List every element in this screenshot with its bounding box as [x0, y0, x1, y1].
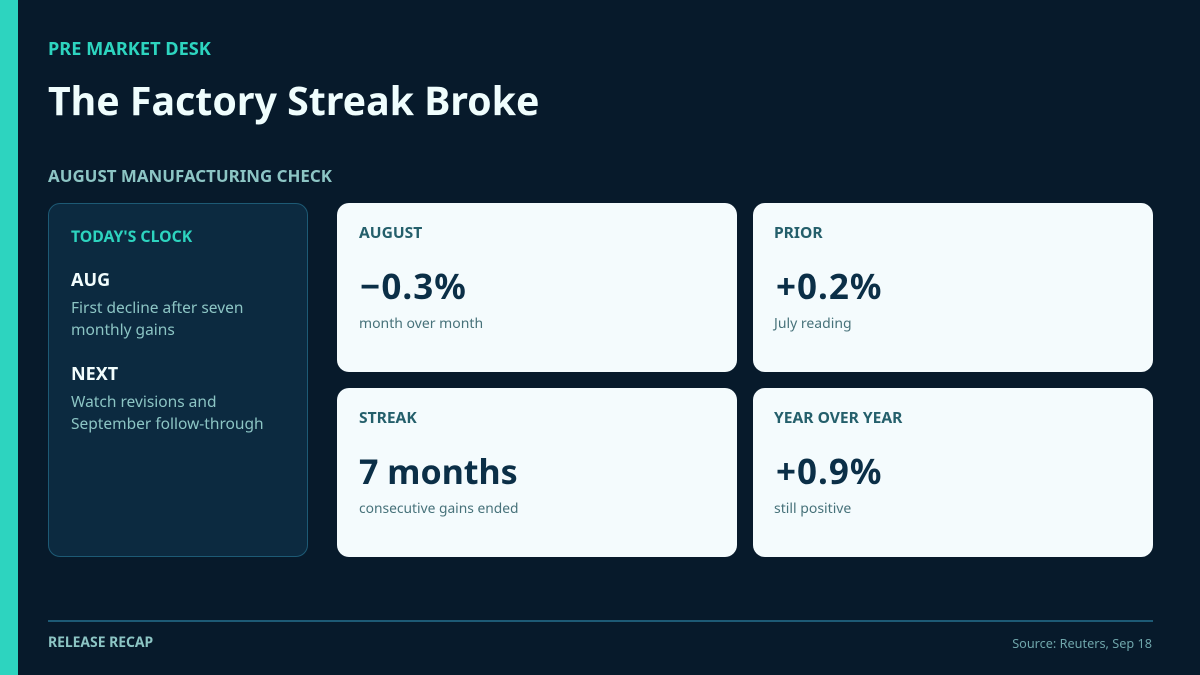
item text: NEXT: Watch revisions and — [71, 390, 216, 412]
section heading: AUGUST MANUFACTURING CHECK — [48, 164, 332, 187]
value: −0.3% — [360, 263, 467, 310]
accent bar — [0, 0, 18, 675]
footer rule — [48, 620, 1153, 622]
item text: AUG: monthly gains — [71, 318, 175, 340]
label: STREAK — [359, 406, 417, 428]
card: Prior — [753, 203, 1153, 372]
item text: NEXT: September follow-through — [71, 412, 264, 434]
note: still positive — [774, 499, 851, 518]
label: PRIOR — [774, 221, 823, 243]
eyebrow: desk name: PRE MARKET DESK — [48, 37, 211, 61]
value: +0.2% — [776, 263, 882, 310]
item heading: AUG: AUG — [71, 268, 110, 292]
title: The Factory Streak Broke — [48, 73, 540, 127]
card: Year over year — [753, 388, 1153, 557]
footer label: RELEASE RECAP — [48, 633, 153, 652]
card: August — [337, 203, 737, 372]
note: consecutive gains ended — [359, 499, 519, 518]
card: Streak — [337, 388, 737, 557]
item text: NEXT — [71, 390, 264, 434]
label: YEAR OVER YEAR — [774, 406, 902, 428]
item text: AUG: First decline after seven — [71, 296, 243, 318]
note: month over month — [359, 314, 483, 333]
value: +0.9% — [776, 448, 882, 495]
source: Source: Reuters, Sep 18 — [1012, 634, 1152, 652]
item text: AUG — [71, 296, 243, 340]
value: 7 months — [359, 448, 518, 494]
note: July reading — [774, 314, 852, 333]
panel: today's clock — [48, 203, 308, 557]
item heading: NEXT: NEXT — [71, 362, 118, 386]
label: AUGUST — [359, 221, 422, 243]
panel heading: TODAY'S CLOCK — [71, 225, 192, 247]
